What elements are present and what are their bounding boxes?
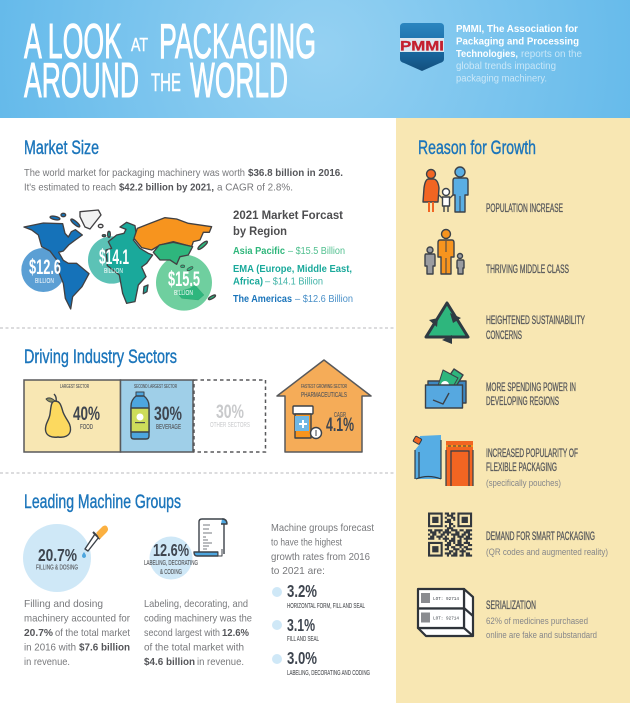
panel: largest sector food [24,380,120,452]
panel: second largest sector beverage: 30% [154,404,182,425]
panel: largest sector food: FOOD [80,424,93,431]
title: WORLD [190,54,288,108]
label: Americas value: BILLION [35,278,54,285]
text: labeling description: of the total market with [144,642,244,654]
text: growth forecast intro [271,522,374,577]
label: population increase: POPULATION INCREASE [486,203,563,215]
icon: QR code [428,514,472,556]
panel: fastest growing sector pharmaceuticals: 4.1% [326,415,354,436]
title [24,15,316,108]
text: filling and dosing description: $7.6 billion [79,642,130,654]
title: PACKAGING [159,15,316,69]
panel: other sectors: 30% [216,402,244,423]
icon: dropper [82,526,107,558]
title: AT [131,35,148,55]
legend: 2021 market forecast by region: Asia Pacific [233,246,285,257]
text: filling and dosing description: machinery accounted for [24,612,130,624]
title: THE [151,69,181,97]
legend: 2021 market forecast by region: by Region [233,226,287,238]
text: filling and dosing description: Filling and dosing [24,598,103,610]
icon: family [423,167,468,212]
label: Americas value [29,256,61,285]
text: growth forecast intro: Machine groups forecast [271,522,374,534]
icon: scroll list [194,519,227,556]
list: fastest growing machine groups [272,581,370,677]
chart: filling and dosing bubble [23,524,107,592]
text: filling and dosing description: in revenue. [24,656,70,668]
text: labeling description: coding machinery was the [144,612,252,624]
label: Asia Pacific value: $15.5 [168,268,200,291]
label: serialization: online are fake and substandard [486,630,597,640]
label: EMA value: BILLION [104,268,123,275]
panel: fastest growing sector pharmaceuticals [277,360,371,452]
text: PMMI description [456,23,582,84]
label: EMA value [99,246,129,275]
label: Americas value: $12.6 [29,256,61,279]
list: fastest growing machine groups: 3.2% [287,581,317,601]
legend: 2021 market forecast by region: Africa) [233,276,263,288]
chart: labeling decorating coding bubble [144,519,227,580]
legend: 2021 market forecast by region: – $12.6 Billion [295,294,353,305]
label: heightened sustainability concerns [486,315,585,342]
label: serialization: SERIALIZATION [486,600,536,612]
text: labeling description: in revenue. [197,656,244,668]
header banner [0,0,630,118]
icon: serialized boxes: LOT: 92714 [433,616,459,622]
text: market size summary: a CAGR of 2.8%. [217,182,293,194]
text: labeling description: second largest with [144,627,220,639]
text: labeling description [144,598,252,668]
text: PMMI description: packaging machinery. [456,72,547,84]
text: PMMI description: global trends impacting [456,60,556,72]
text: labeling description: Labeling, decorating, and [144,598,248,610]
text: filling and dosing description [24,598,130,668]
heading: driving industry sectors: Driving Industry Sectors [24,347,177,368]
label: flexible packaging: FLEXIBLE PACKAGING [486,462,557,474]
icon: serialized boxes [418,589,473,636]
text: labeling description: 12.6% [222,627,250,639]
icon: PMMI logo [400,23,444,71]
chart: labeling decorating coding bubble: 12.6% [153,540,189,560]
text: PMMI description: PMMI, The Association for [456,23,578,35]
label: Asia Pacific value: BILLION [174,290,193,297]
label: thriving middle class: THRIVING MIDDLE CLASS [486,264,569,276]
legend: 2021 market forecast by region: – $14.1 Billion [265,276,323,288]
label: more spending power: DEVELOPING REGIONS [486,396,559,408]
list: fastest growing machine groups: 3.1% [287,615,315,635]
panel: other sectors: OTHER SECTORS [210,422,250,429]
legend: 2021 market forecast by region [233,210,353,305]
label: smart packaging: (QR codes and augmented reality) [486,547,608,557]
label: EMA value: $14.1 [99,246,129,269]
panel: other sectors [194,380,266,452]
icon: serialized boxes: LOT: 92714 [433,596,459,602]
panel: reason for growth background [396,118,630,703]
text: PMMI description: Technologies, [456,48,518,60]
label: more spending power [486,382,576,408]
label: Asia Pacific value [168,268,200,297]
legend: 2021 market forecast by region: EMA (Europe, Middle East, [233,264,352,275]
text: market size summary: $36.8 billion in 2016. [248,167,343,179]
title: AROUND [24,54,139,108]
list: fastest growing machine groups: FILL AND SEAL [287,636,319,643]
panel: second largest sector beverage: BEVERAGE [156,424,181,431]
text: PMMI description: reports on the [521,48,582,60]
icon: wallet with money [426,369,466,408]
label: smart packaging [486,531,608,557]
icon: pear [45,394,71,437]
panel: second largest sector beverage [120,380,193,452]
title: A LOOK [24,15,122,69]
text: market size summary: The world market for packaging machinery was worth [24,167,245,179]
text: market size summary [24,167,343,194]
panel: largest sector food: 40% [73,404,100,425]
icon: bottle [131,392,149,439]
text: filling and dosing description: 20.7% [24,627,54,639]
text: filling and dosing description: in 2016 with [24,642,76,654]
icon: recycling triangle [426,303,468,344]
chart: world map with regional values [21,210,216,311]
legend: 2021 market forecast by region: The Americas [233,294,292,305]
label: flexible packaging [486,448,578,488]
text: labeling description: $4.6 billion [144,656,195,668]
icon: middle class figures [425,230,464,274]
text: PMMI description: Packaging and Processing [456,36,579,48]
text: filling and dosing description: of the total market [55,627,130,639]
text: market size summary: $42.2 billion by 2021, [119,182,214,194]
list: fastest growing machine groups: HORIZONTAL FORM, FILL AND SEAL [287,603,365,610]
panel: fastest growing sector pharmaceuticals: PHARMACEUTICALS [301,392,347,399]
panel: fastest growing sector pharmaceuticals: CAGR [334,412,346,419]
panel: largest sector food: LARGEST SECTOR [60,384,89,390]
label: heightened sustainability concerns: CONCERNS [486,330,522,342]
chart: filling and dosing bubble: FILLING & DOSING [36,564,78,572]
label: flexible packaging: (specifically pouches) [486,478,561,488]
panel: fastest growing sector pharmaceuticals: FASTEST GROWING SECTOR [301,384,347,390]
panel: second largest sector beverage: SECOND LARGEST SECTOR [134,384,177,390]
chart: labeling decorating coding bubble: & CODING [160,569,182,576]
icon: flexible pouches [413,435,473,486]
heading: leading machine groups: Leading Machine Groups [24,492,181,513]
chart: filling and dosing bubble: 20.7% [38,545,77,565]
heading: reason for growth: Reason for Growth [418,138,536,159]
list: fastest growing machine groups: LABELING, DECORATING AND CODING [287,670,370,677]
text: growth forecast intro: growth rates from 2016 [271,551,370,563]
legend: 2021 market forecast by region: – $15.5 Billion [288,246,345,257]
chart: labeling decorating coding bubble: LABELING, DECORATING [144,560,198,567]
icon: PMMI logo: PMMI [400,38,444,54]
text: growth forecast intro: to 2021 are: [271,565,325,577]
text: growth forecast intro: to have the highest [271,536,342,548]
legend: 2021 market forecast by region: 2021 Market Forcast [233,210,343,222]
heading: market size: Market Size [24,138,99,159]
label: serialization [486,600,597,640]
list: fastest growing machine groups: 3.0% [287,648,317,668]
icon: pill bottle [293,406,322,438]
text: market size summary: It's estimated to reach [24,182,116,194]
label: serialization: 62% of medicines purchased [486,616,588,626]
